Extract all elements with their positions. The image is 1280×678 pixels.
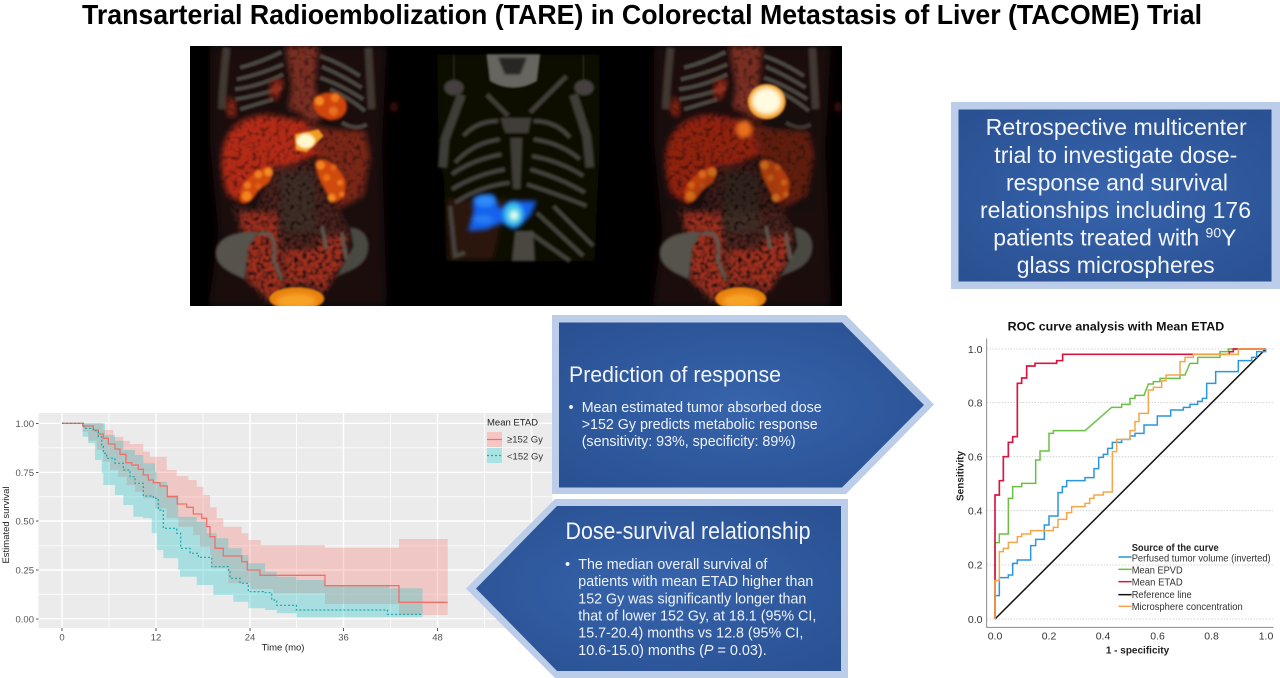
x axis tick labels: 24 <box>245 632 255 644</box>
curve: microsphere concentration <box>995 349 1266 619</box>
y tick labels <box>968 344 983 626</box>
y tick labels: 0.6 <box>968 452 983 464</box>
legend text: Mean EPVD <box>1132 564 1183 576</box>
heading: Dose-survival relationship <box>566 518 810 545</box>
legend: ≥152 Gy <box>507 434 543 446</box>
heading: Prediction of response <box>569 362 781 387</box>
x axis tick labels: 0 <box>59 632 65 644</box>
x tick labels <box>988 630 1273 642</box>
x tick labels: 0.8 <box>1204 630 1219 642</box>
chart title: ROC curve analysis with Mean ETAD <box>1008 320 1225 334</box>
y axis tick labels: 0.50 <box>16 516 34 528</box>
bullet text: (sensitivity: 93%, specificity: 89%) <box>582 434 796 450</box>
arrow panel: dose-survival relationship <box>466 499 848 678</box>
x tick labels: 1.0 <box>1259 630 1273 642</box>
box: trial description <box>951 102 1280 289</box>
y tick labels: 1.0 <box>968 344 983 356</box>
centre scan: Tc-99m MAA SPECT/CT <box>437 54 600 261</box>
box text: patients treated with <box>993 224 1199 250</box>
legend <box>487 418 543 463</box>
bullet text: that of lower 152 Gy, at 18.1 (95% CI, <box>578 609 816 625</box>
x axis tick labels: 36 <box>338 632 349 644</box>
survival line: at least 152 Gy <box>62 423 448 602</box>
bullet text: Mean estimated tumor absorbed dose <box>582 400 822 416</box>
bullet text: • <box>565 557 570 573</box>
x axis title: Time (mo) <box>262 642 304 654</box>
legend text: Microsphere concentration <box>1132 601 1243 613</box>
legend text: Reference line <box>1132 589 1192 601</box>
y axis tick labels: 1.00 <box>16 419 34 430</box>
reference line <box>995 349 1266 619</box>
legend text: Mean ETAD <box>1132 576 1183 588</box>
medical images: PET/CT and SPECT/CT scans <box>190 46 842 310</box>
y tick labels: 0.2 <box>968 560 983 572</box>
bullet text: patients with mean ETAD higher than <box>578 574 813 590</box>
x tick labels: 0.2 <box>1042 630 1056 642</box>
box text: relationships including 176 <box>980 197 1251 223</box>
y tick labels: 0.8 <box>968 398 983 410</box>
survival chart: Kaplan-Meier by mean ETAD <box>1 413 552 654</box>
bullet text: 15.7-20.4) months vs 12.8 (95% CI, <box>578 626 803 642</box>
y tick labels: 0.4 <box>968 506 983 518</box>
box text: glass microspheres <box>1017 252 1215 278</box>
curve: mean ETAD <box>995 349 1266 619</box>
bullet text: 152 Gy was significantly longer than <box>578 592 806 608</box>
survival line: below 152 Gy <box>62 423 422 614</box>
box text <box>980 114 1251 278</box>
arrow panel: prediction of response <box>552 315 934 494</box>
y axis title: Sensitivity <box>956 451 966 501</box>
box text: response and survival <box>1006 170 1228 196</box>
curve: perfused tumor volume <box>995 349 1266 619</box>
y axis tick labels: 0.75 <box>16 468 34 479</box>
confidence band: at least 152 Gy <box>83 423 448 615</box>
x axis tick labels <box>59 632 443 644</box>
bullet text <box>568 400 822 450</box>
bullet text: The median overall survival of <box>578 557 768 573</box>
box text: trial to investigate dose- <box>994 142 1237 168</box>
x tick labels: 0.4 <box>1096 630 1110 642</box>
ROC curve chart <box>956 320 1273 656</box>
box text: 90 <box>1206 224 1221 240</box>
box text: Y <box>1221 224 1236 250</box>
legend swatches <box>1118 555 1132 559</box>
box text: Retrospective multicenter <box>986 114 1247 140</box>
legend: <152 Gy <box>507 452 543 462</box>
left scan: pre-treatment PET/CT <box>208 46 398 310</box>
y axis tick labels <box>16 419 34 626</box>
y tick labels: 0.0 <box>968 614 983 626</box>
bullet text: • <box>568 400 574 416</box>
legend text <box>1132 543 1271 613</box>
confidence band: below 152 Gy <box>83 423 422 617</box>
y axis tick labels: 0.25 <box>16 566 34 576</box>
plot lines <box>987 338 1273 627</box>
curve: mean EPVD <box>995 349 1266 619</box>
y axis title: Estimated survival <box>1 486 12 564</box>
x axis tick labels: 48 <box>432 632 443 644</box>
y axis tick labels: 0.00 <box>16 614 34 626</box>
x tick labels: 0.6 <box>1150 630 1165 642</box>
bullet text: 10.6-15.0) months (P = 0.03). <box>578 643 767 659</box>
right scan: post-treatment PET/CT <box>652 46 842 310</box>
x axis tick labels: 12 <box>151 632 161 644</box>
bullet text <box>565 557 816 659</box>
x tick labels: 0.0 <box>988 630 1002 642</box>
legend text: Source of the curve <box>1132 543 1219 554</box>
x axis title: 1 - specificity <box>1106 646 1170 656</box>
bullet text: >152 Gy predicts metabolic response <box>582 417 818 433</box>
legend: Mean ETAD <box>487 418 538 428</box>
plot area <box>38 413 552 628</box>
axis ticks <box>36 424 438 631</box>
